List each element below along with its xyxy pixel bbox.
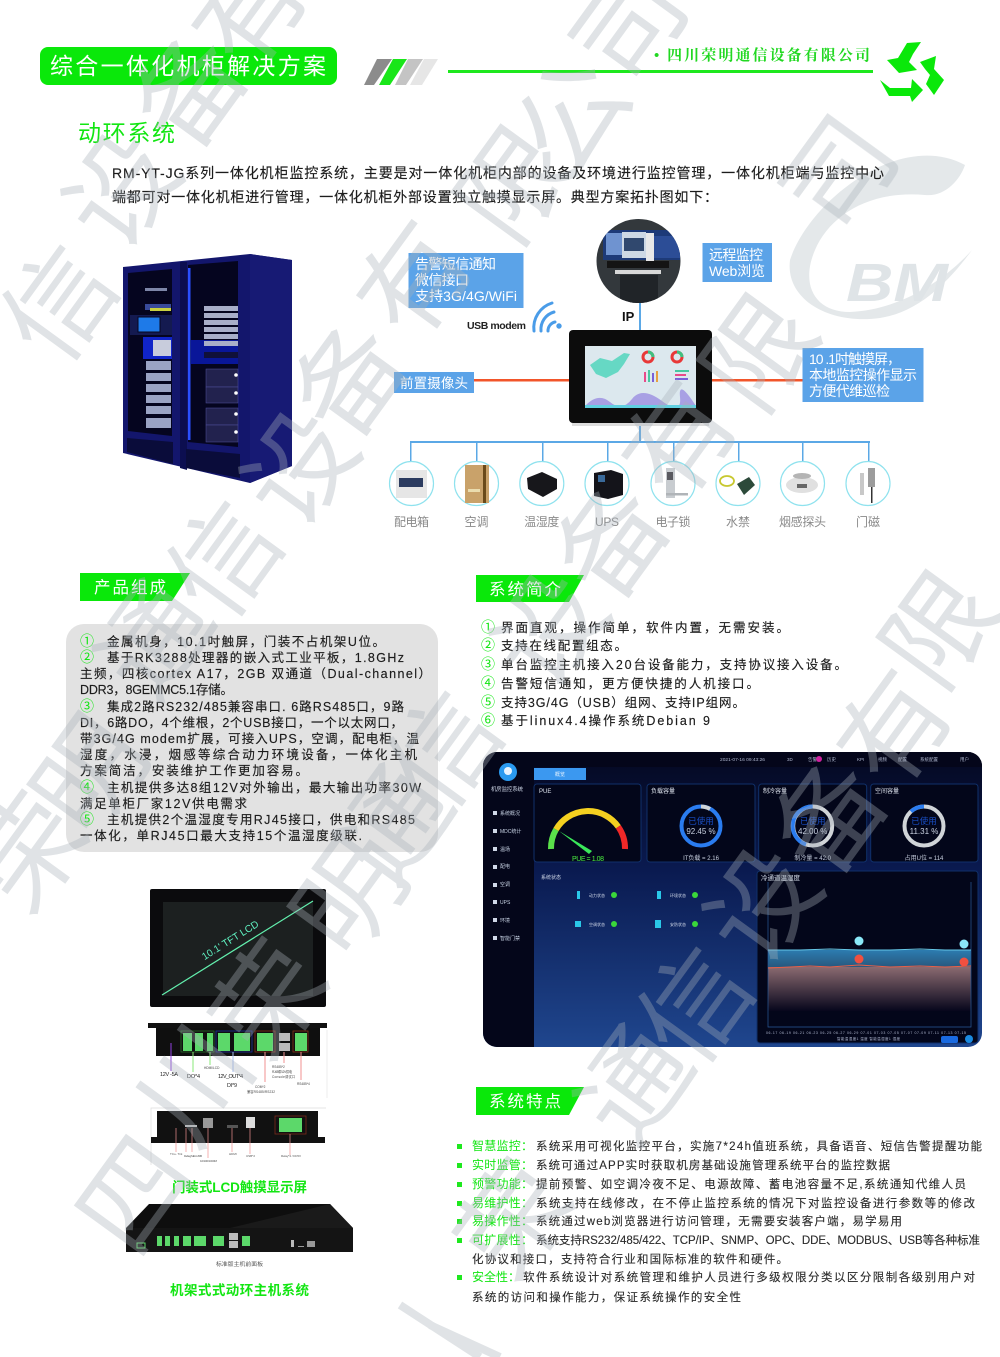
list: system features: 系统的访问和操作能力，保证系统操作的安全性: [472, 1290, 741, 1304]
panel: product composition: 一体化，单RJ45口最大支持15个温湿度级联.: [80, 828, 362, 843]
panel: product composition: 带3G/4G modem扩展，可接入UPS，空调，配电柜，温: [80, 731, 419, 746]
list: system overview: 界面直观，操作简单，软件内置，无需安装。: [501, 620, 789, 635]
background logo BM: BM: [846, 253, 949, 313]
panel: product composition: 集成2路RS232/485兼容串口. 6路RS485口，9路: [107, 699, 404, 714]
watermark: 有: [579, 346, 768, 525]
rear panel diagram: ports: 12V_OUT*4: [218, 1074, 243, 1080]
panel: product composition: DI，6路DO，4个维根，2个USB接口，一个以太网口，: [80, 715, 403, 730]
card: load capacity: 92.45 %: [686, 827, 716, 836]
watermark: 川: [94, 991, 283, 1170]
watermark: 设: [199, 374, 388, 553]
header slashes: [364, 59, 438, 85]
caption: rack host: 机架式式动环主机系统: [170, 1282, 310, 1298]
rear panel diagram: front side: Relay*4 / DC5V: [281, 1154, 301, 1158]
list: system features: 可扩展性：: [472, 1233, 533, 1247]
list: system overview: ③: [481, 656, 495, 672]
watermark: 通: [54, 546, 243, 725]
card: cooling capacity: 制冷容量: [763, 787, 787, 795]
device: electronic lock: [651, 462, 695, 529]
rear panel diagram: front side: [151, 1030, 327, 1165]
card: load capacity: 负载容量: [651, 787, 675, 795]
label: IP: IP: [622, 309, 635, 324]
system status block: 动力状态: [589, 892, 605, 898]
card: load capacity: IT负载 = 2.16: [683, 854, 720, 862]
list: system features: 系统可通过APP实时获取机房基础设施管理系统平台的监控数据: [536, 1158, 890, 1172]
watermark: 明: [249, 803, 438, 982]
device: smoke detector: 烟感探头: [779, 514, 826, 529]
dashboard top bar text: 告警: [808, 756, 817, 763]
dashboard side menu: 配电: [500, 863, 510, 870]
system status block: 安防状态: [670, 921, 686, 927]
rear panel diagram: ports: DO*4: [187, 1074, 200, 1080]
list: system overview: 单台监控主机接入20台设备能力，支持协议接入设备。: [501, 657, 847, 672]
system status block: [541, 874, 698, 928]
device: distribution box: 配电箱: [394, 514, 429, 529]
card: rack space: 11.31 %: [910, 827, 938, 836]
device: UPS: [585, 462, 629, 529]
section banner: 系统特点: [476, 1087, 584, 1115]
list: system features: 安全性：: [472, 1269, 520, 1284]
watermark: 限: [659, 259, 848, 438]
dashboard side menu: 智能门禁: [500, 935, 520, 942]
rear panel diagram: ports: 兼容RS485/RS232: [247, 1089, 275, 1094]
panel: product composition: 金属机身，10.1吋触屏，门装不占机架U位。: [107, 634, 385, 649]
panel: product composition: DDR3，8GEMMC5.1存储。: [80, 682, 233, 697]
company name: • 四川荣明通信设备有限公司: [654, 46, 870, 64]
dashboard screenshot: [483, 752, 982, 1047]
callout: alarms: 告警短信通知: [415, 256, 496, 272]
chart: cold aisle temperature and humidity: 智能温湿度1 温度 智能温湿度1 湿度: [837, 1036, 900, 1041]
touch screen device: [569, 330, 712, 426]
system status block: 环境状态: [670, 892, 686, 898]
rear panel diagram: ports: 12V -5A: [160, 1072, 178, 1078]
chart: cold aisle temperature and humidity: [757, 871, 978, 1043]
list: system features: 系统支持RS232/485/422、TCP/IP、SNMP、OPC、DDE、MODBUS、USB等各种标准: [536, 1233, 980, 1247]
dashboard top bar text: 2021-07-16 09:43:26: [720, 757, 766, 762]
topology connector lines: [410, 303, 870, 462]
dashboard tab: 概览: [555, 771, 565, 778]
dashboard side menu: 温场: [500, 846, 510, 853]
intro paragraph: 端都可对一体化机柜进行管理，一体化机柜外部设置独立触摸显示屏。典型方案拓扑图如下：: [112, 189, 718, 205]
card: rack space: 已使用: [911, 816, 937, 826]
label: USB modem: USB modem: [467, 320, 526, 332]
device: water sensor: 水禁: [726, 515, 750, 529]
intro paragraph: RM-YT-JG系列一体化机柜监控系统，主要是对一体化机柜内部的设备及环境进行监控管理，一体化机柜端与监控中心: [112, 165, 884, 181]
callout: alarms: 支持3G/4G/WiFi: [415, 288, 517, 304]
section banner: 系统简介: [476, 575, 584, 602]
cabinet illustration: [123, 254, 292, 483]
list: system features: 易操作性：: [472, 1213, 533, 1228]
chart: cold aisle temperature and humidity: 冷通道温湿度: [761, 873, 800, 882]
panel: product composition: 主频，四核cortex A17，2GB 双通道（Dual-channel）: [80, 667, 431, 681]
panel: product composition: ②: [80, 649, 94, 665]
list: system features: 实时监管：: [472, 1157, 533, 1172]
dashboard side menu: 系统概况: [500, 810, 520, 817]
list: system overview: 支持3G/4G（USB）组网、支持IP组网。: [501, 695, 745, 710]
list: system features: 软件系统设计对系统管理和维护人员进行多级权限分类以区分限制各级别用户对: [523, 1270, 976, 1284]
callout: alarms: [408, 253, 524, 308]
panel: product composition: 基于RK3288处理器的嵌入式工业平板，1.8GHz: [107, 650, 404, 665]
panel: product composition: 方案简洁，安装维护工作更加容易。: [80, 763, 308, 778]
watermark: 设: [449, 536, 638, 715]
panel: product composition: ①: [80, 633, 94, 649]
card: PUE gauge: [534, 784, 641, 863]
dashboard side menu: MDC统计: [500, 828, 521, 835]
system status block: 空调状态: [589, 921, 605, 927]
section title: 动环系统: 动环系统: [78, 120, 175, 146]
list: system features: 系统通过web浏览器进行访问管理，无需要安装客户端，易学易用: [536, 1214, 902, 1228]
device: air conditioner: 空调: [464, 515, 489, 529]
watermark: 有: [794, 635, 983, 814]
card: PUE gauge: PUE = 1.08: [572, 856, 604, 863]
chart: cold aisle temperature and humidity: 06-17 06-19 06-21 06-23 06-25 06-27 06-29 07-01 07-03 07-05 07-07 07-09 07-11 07-13 07-15: [766, 1031, 966, 1035]
list: system overview: [481, 619, 847, 728]
dashboard top bar text: 视频: [878, 756, 887, 763]
panel: product composition: 主机提供2个温湿度专用RJ45接口，供电和RS485: [107, 812, 415, 827]
list: system features: 化协议和接口，支持符合行业和国际标准的软件和硬件。: [472, 1252, 788, 1266]
section banner: 系统简介: 系统简介: [489, 580, 562, 599]
device: air conditioner: [454, 462, 498, 529]
rear panel diagram: ports: RS485*4: [297, 1082, 310, 1086]
watermark: 公: [472, 21, 661, 200]
header banner: [40, 47, 337, 85]
panel: product composition: ⑤: [80, 811, 94, 827]
system status block: 系统状态: [541, 874, 561, 881]
dashboard top bar text: 历史: [827, 756, 836, 763]
card: PUE gauge: PUE: [539, 789, 551, 795]
list: system overview: ④: [481, 675, 495, 691]
list: system features: 智慧监控：: [472, 1138, 533, 1153]
rear panel diagram: ports: COM*2: [255, 1085, 266, 1089]
watermark: 通: [534, 991, 723, 1170]
section banner: 系统特点: 系统特点: [489, 1092, 561, 1111]
rear panel diagram: front side: TCo- Tint: [170, 1152, 183, 1156]
dashboard top bar text: 配置: [898, 757, 907, 763]
rear panel diagram: ports: RJ45带12V供电: [272, 1069, 293, 1074]
list: system features: [457, 1138, 982, 1304]
card: cooling capacity: 制冷量 = 42.0: [794, 854, 832, 862]
list: system overview: ②: [481, 637, 495, 653]
list: system features: 预警功能：: [472, 1176, 533, 1191]
photo: monitoring centre: [596, 219, 682, 303]
watermark: 备: [249, 286, 438, 465]
dashboard logo: [491, 763, 523, 793]
watermark: 设: [662, 811, 851, 990]
list: system overview: ①: [481, 619, 495, 635]
card: cooling capacity: 42.00 %: [798, 827, 827, 836]
rear panel diagram: front side: USB*2: [246, 1154, 255, 1158]
list: system features: 系统支持在线修改，在不停止监控系统的情况下对监控设备进行参数等的修改: [536, 1196, 976, 1210]
header line: [448, 70, 873, 73]
watermark: 有: [314, 186, 503, 365]
list: system overview: ⑥: [481, 712, 495, 728]
section banner: 产品组成: [80, 573, 190, 601]
rear panel diagram: front side: HDMI: [229, 1152, 237, 1156]
icon: recycle logo: [880, 42, 944, 102]
callout: front camera: [394, 372, 474, 393]
dashboard tab: [534, 768, 586, 780]
dashboard top bar text: [720, 756, 969, 763]
list: system features: 易维护性：: [472, 1196, 533, 1210]
header banner: 综合一体化机柜解决方案: [50, 53, 326, 79]
device: temperature sensor: [520, 462, 564, 529]
callout: touch screen: 10 .1吋触摸屏，: [809, 351, 901, 367]
dashboard top bar text: 用户: [960, 756, 969, 763]
dashboard logo: 机房监控系统: [491, 785, 523, 793]
dashboard top bar text: KPI: [857, 757, 864, 762]
watermark: 设: [21, 96, 210, 275]
card: cooling capacity: [759, 784, 867, 862]
list: system overview: 基于linux4.4操作系统Debian 9: [501, 713, 710, 728]
list: system features: 系统采用可视化监控平台，实施7*24h值班系统，具备语音、短信告警提醒功能: [536, 1139, 982, 1153]
dashboard side menu: UPS: [500, 900, 511, 906]
watermark: 荣: [169, 906, 358, 1085]
device: door sensor: [846, 462, 890, 529]
dashboard side menu: [493, 810, 521, 942]
lcd screen photo: [150, 889, 326, 1007]
lcd screen photo: 10.1' TFT LCD: [200, 919, 261, 963]
card: rack space: 占用U位 = 114: [905, 854, 944, 862]
device: smoke detector: [779, 462, 826, 529]
dashboard top bar text: 3D: [787, 757, 794, 762]
watermark: 司: [739, 80, 928, 259]
watermark: 备: [511, 448, 700, 627]
panel: product composition: [66, 624, 438, 852]
panel: product composition: ③: [80, 698, 94, 714]
panel: product composition: 满足单柜厂家12V供电需求: [80, 796, 247, 811]
watermark: 通: [294, 731, 483, 910]
callout: touch screen: [802, 348, 924, 402]
section banner: 产品组成: 产品组成: [94, 578, 166, 597]
card: rack space: 空间容量: [875, 787, 899, 795]
intro paragraph: [112, 165, 884, 205]
watermark: 限: [414, 91, 603, 270]
callout: remote monitoring: [702, 243, 772, 282]
rear panel diagram: ports: RS485*2: [272, 1065, 285, 1069]
device: UPS: UPS: [595, 515, 619, 529]
dashboard side menu: 环境: [500, 917, 510, 924]
background logo BM: [790, 156, 972, 319]
watermark: 信: [124, 466, 313, 645]
card: load capacity: 已使用: [688, 816, 714, 826]
callout: remote monitoring: Web浏览: [709, 263, 765, 279]
rear panel diagram: front side: 10/100/1000M: [200, 1159, 218, 1163]
card: cooling capacity: 已使用: [800, 816, 825, 826]
list: system overview: 告警短信通知，更方便快捷的人机接口。: [501, 676, 759, 691]
list: system overview: ⑤: [481, 694, 495, 710]
callout: alarms: 微信接口: [415, 272, 469, 288]
callout: touch screen: 方便代维巡检: [809, 383, 890, 399]
rack host illustration: [126, 1204, 353, 1252]
device: distribution box: [390, 462, 434, 529]
card: load capacity: [647, 784, 755, 862]
device: door sensor: 门磁: [856, 514, 880, 529]
rear panel diagram: ports: Console调试口: [272, 1074, 295, 1079]
list: system features: 提前预警、如空调冷夜不足、电源故障、蓄电池容量不足,系统通知代维人员: [536, 1177, 966, 1191]
dashboard side menu: 空调: [500, 881, 510, 888]
watermark: 备: [729, 723, 918, 902]
rear panel diagram: front side: Debug Micro USB: [184, 1154, 202, 1158]
watermark: 备: [89, 0, 278, 176]
device: temperature sensor: 温湿度: [524, 514, 559, 529]
rear panel diagram: ports: DI*9: [227, 1083, 237, 1089]
card: rack space: [871, 784, 978, 862]
caption: door-mount LCD: 门装式LCD触摸显示屏: [172, 1179, 307, 1195]
watermark: 四: [34, 1101, 223, 1280]
watermark: 荣: [414, 1126, 603, 1305]
panel: product composition: 湿度，水浸，烟感等综合动力环境设备，一体化主机: [80, 747, 417, 762]
callout: touch screen: 本地监控操作显示: [809, 367, 917, 383]
device: electronic lock: 电子锁: [656, 514, 690, 529]
watermark: 信: [344, 656, 533, 835]
panel: product composition: ④: [80, 779, 94, 795]
caption: standard host front panel: 标准版主机前面板: [216, 1260, 263, 1268]
callout: front camera: 前置摄像头: [400, 375, 468, 391]
device: water sensor: [716, 462, 760, 529]
icon: wifi: [534, 303, 561, 331]
rear panel diagram: ports: [148, 1023, 327, 1094]
list: system overview: 支持在线配置组态。: [501, 638, 627, 653]
callout: remote monitoring: 远程监控: [709, 247, 763, 263]
watermark: 信: [595, 912, 784, 1091]
rear panel diagram: ports: HDMI/LCD: [204, 1066, 220, 1070]
dashboard top bar text: 系统配置: [920, 756, 938, 763]
panel: product composition: 主机提供多达8组12V对外输出，最大输出功率30W: [107, 780, 421, 795]
